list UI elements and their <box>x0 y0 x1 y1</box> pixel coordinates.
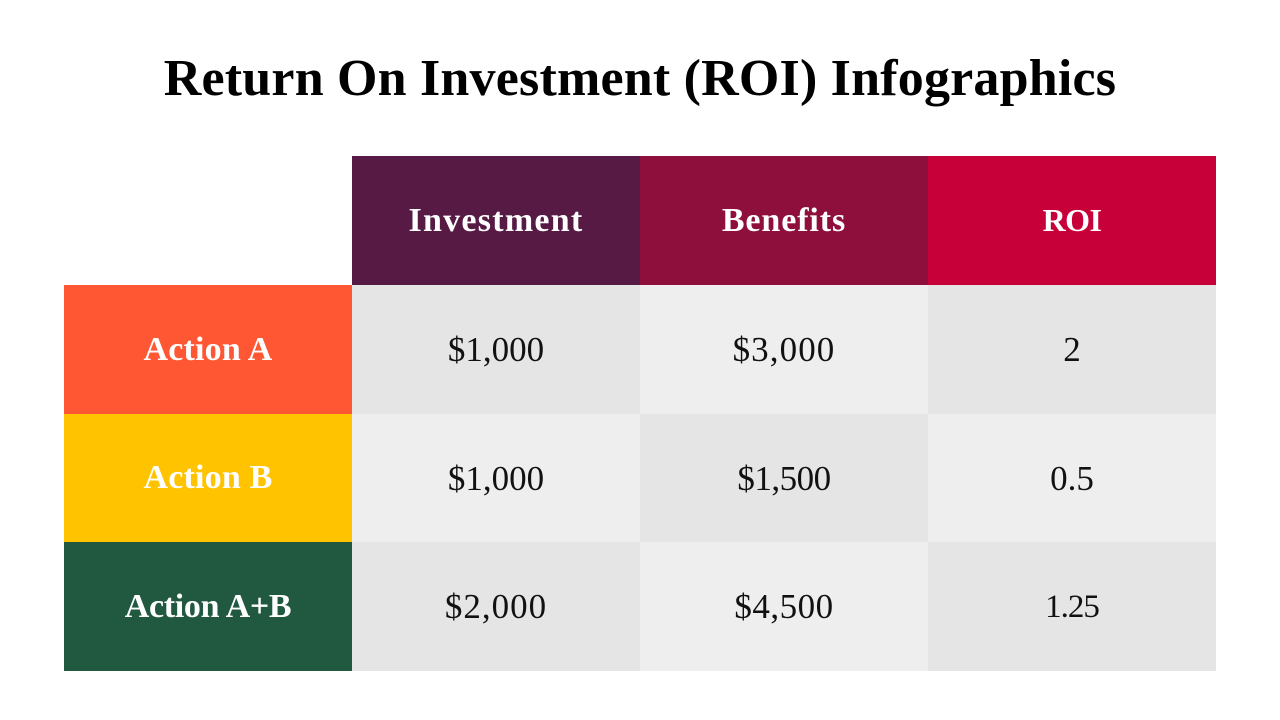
header: Benefits <box>640 156 928 285</box>
cell: Action A+B ROI <box>928 542 1216 671</box>
cell: Action A+B benefits <box>640 542 928 671</box>
cell: Action B investment <box>352 414 640 542</box>
cell: Action A ROI: 2 <box>1063 330 1081 369</box>
cell: Action A ROI <box>928 285 1216 414</box>
cell: Action B benefits <box>640 414 928 542</box>
cell: Action B benefits: $1,500 <box>737 458 831 498</box>
row label: Action B: Action B <box>143 459 273 496</box>
cell: Action A investment: $1,000 <box>448 330 544 369</box>
title: Return On Investment (ROI) Infographics <box>164 50 1116 107</box>
header: ROI: ROI <box>1043 202 1101 238</box>
cell: Action A benefits <box>640 285 928 414</box>
header: Benefits: Benefits <box>722 202 846 238</box>
table <box>64 156 1216 671</box>
cell: Action A+B investment: $2,000 <box>445 587 547 626</box>
row label: Action A+B <box>64 542 352 671</box>
header: Investment: Investment <box>409 202 583 238</box>
header: ROI <box>928 156 1216 285</box>
row label: Action A+B: Action A+B <box>125 588 291 624</box>
row label: Action B <box>64 414 352 542</box>
header: Investment <box>352 156 640 285</box>
cell: Action A investment <box>352 285 640 414</box>
cell: Action B ROI <box>928 414 1216 542</box>
row label: Action A <box>64 285 352 414</box>
cell: Action B investment: $1,000 <box>448 458 544 498</box>
row label: Action A: Action A <box>143 330 273 368</box>
cell: Action A+B investment <box>352 542 640 671</box>
cell: Action B ROI: 0.5 <box>1050 458 1094 498</box>
cell: Action A benefits: $3,000 <box>733 330 835 369</box>
cell: Action A+B benefits: $4,500 <box>734 587 834 626</box>
cell: Action A+B ROI: 1.25 <box>1045 588 1099 624</box>
